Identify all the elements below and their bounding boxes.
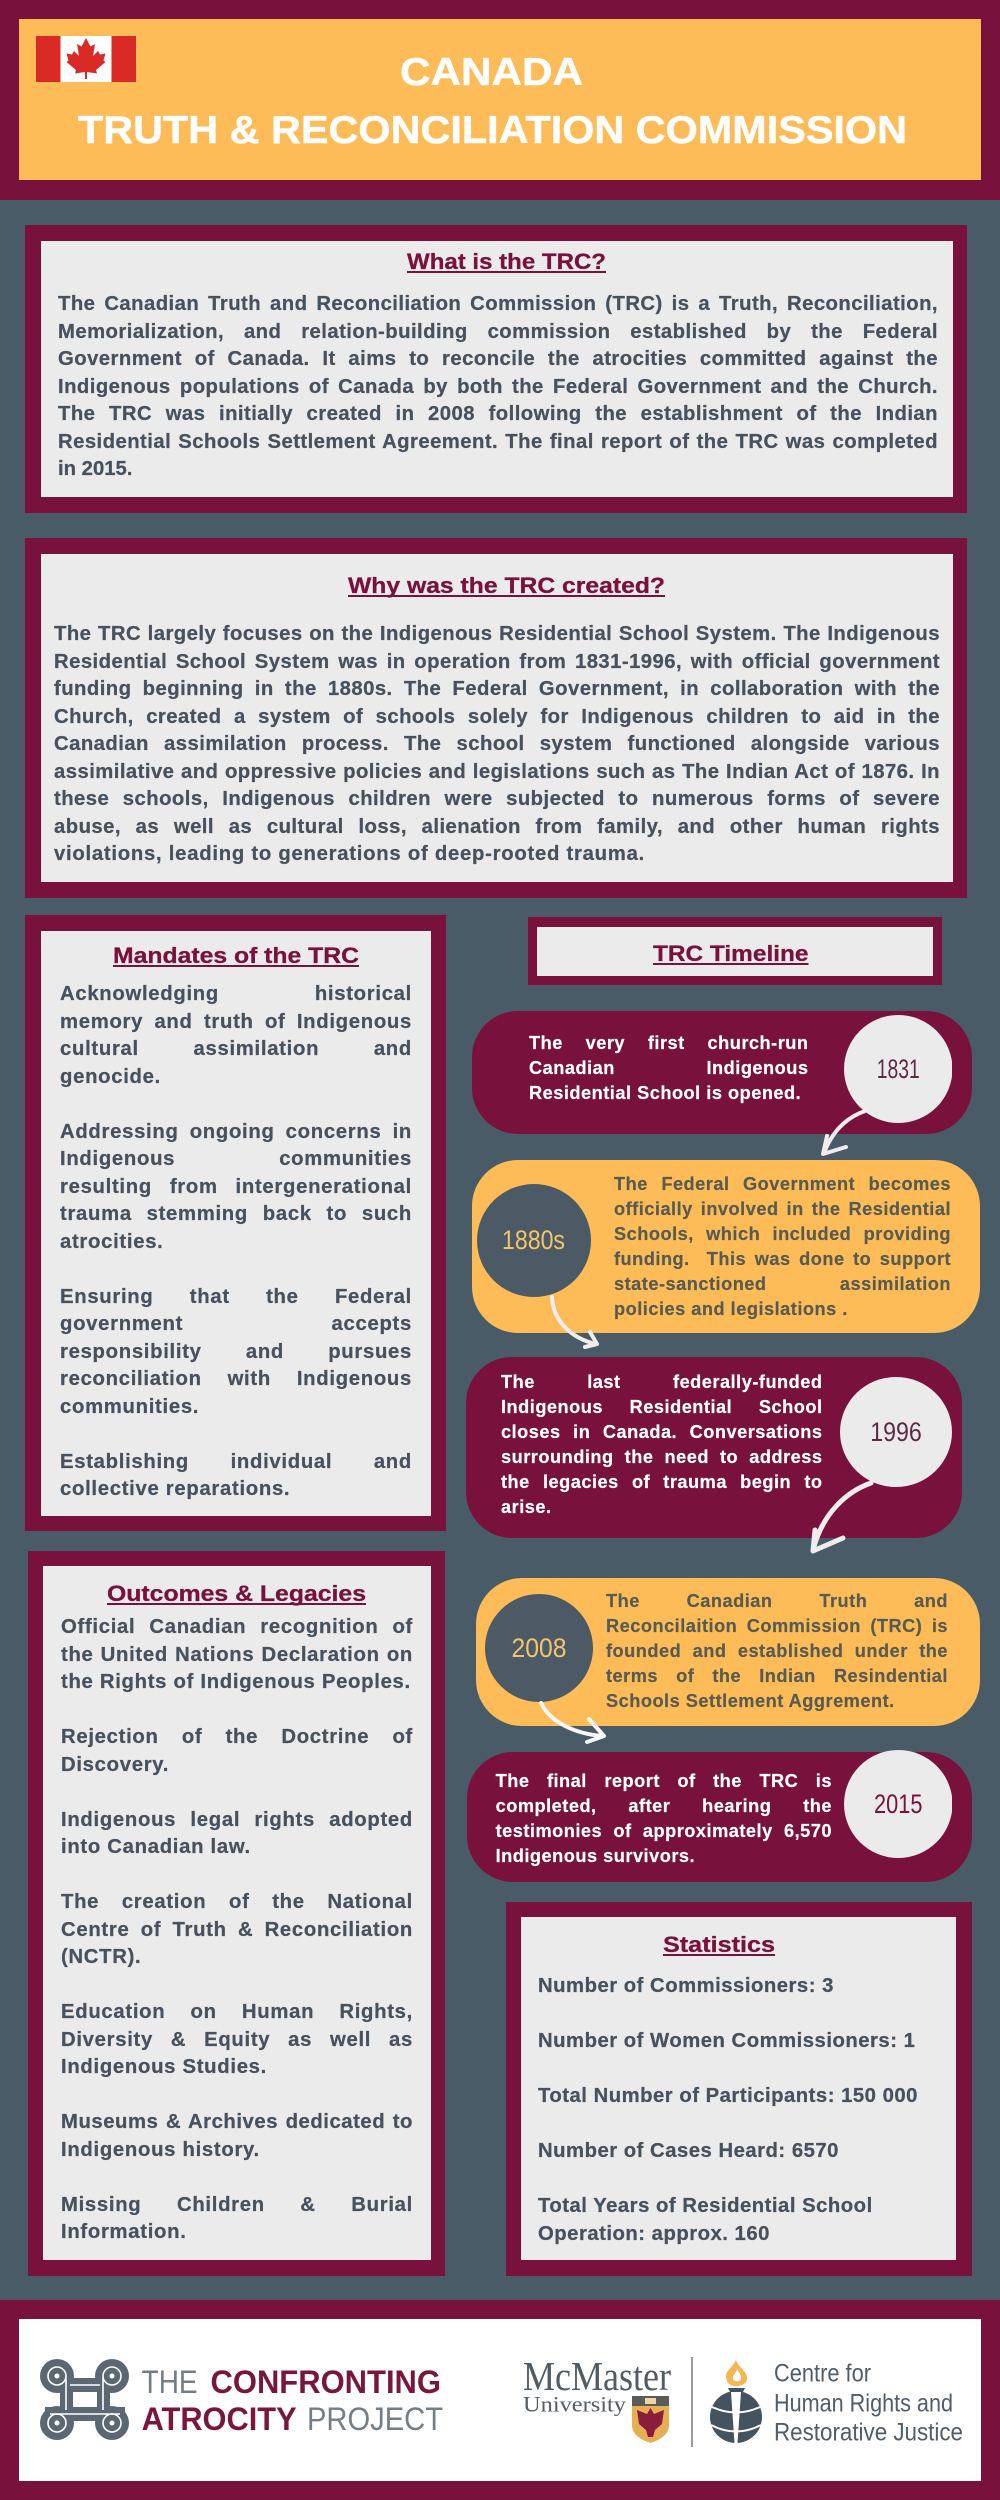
- text: outcomes list: Museums & Archives dedicated to: [61, 2111, 413, 2133]
- text: TRC description: in 2015.: [58, 458, 132, 480]
- footer logos: [19, 2319, 981, 2481]
- text: outcomes list: the Rights of Indigenous Peoples.: [61, 1671, 411, 1693]
- text: outcomes list: (NCTR).: [61, 1946, 141, 1968]
- text: why created: Canadian assimilation process. The school system functioned alongside various: [54, 733, 940, 755]
- text: 2015 event: [496, 1770, 832, 1866]
- title: CANADA: [400, 51, 583, 94]
- logo text: The Confronting Atrocity Project: [142, 2364, 443, 2437]
- year badge: 1996: 1996: [870, 1417, 922, 1447]
- heading: What is the TRC: What is the TRC?: [407, 249, 606, 274]
- text: 1880s event: The Federal Government becomes: [614, 1174, 951, 1194]
- text: 2008 event: The Canadian Truth and: [606, 1590, 948, 1610]
- heading: Mandates of the TRC: Mandates of the TRC: [113, 943, 359, 968]
- text: 1831 event: The very first church-run: [529, 1032, 808, 1052]
- title: [78, 51, 907, 150]
- text: mandates list: Ensuring that the Federal: [60, 1286, 412, 1308]
- heading: TRC Timeline: TRC Timeline: [653, 941, 808, 966]
- panel: Outcomes & Legacies: [28, 1551, 445, 2276]
- text: outcomes list: Indigenous Studies.: [61, 2056, 267, 2078]
- text: 1996 event: surrounding the need to address: [501, 1446, 822, 1466]
- text: outcomes list: into Canadian law.: [61, 1836, 251, 1858]
- text: statistics list: Total Number of Participants: 150 000: [538, 2085, 918, 2107]
- logo text: McMaster University: [523, 2353, 671, 2417]
- text: 1880s event: [614, 1174, 951, 1320]
- text: outcomes list: Indigenous history.: [61, 2138, 260, 2160]
- text: why created: The TRC largely focuses on the Indigenous Residential School System. The Indigenous: [54, 623, 940, 645]
- text: 1880s event: funding. This was done to support: [614, 1248, 951, 1268]
- text: 2008 event: [606, 1590, 948, 1712]
- text: mandates list: reconciliation with Indigenous: [60, 1368, 412, 1390]
- text: 2015 event: completed, after hearing the: [496, 1796, 832, 1816]
- text: 1996 event: the legacies of trauma begin to: [501, 1472, 822, 1492]
- year badge: 1880s: 1880s: [502, 1225, 565, 1255]
- logo text: McMaster University: University: [523, 2392, 626, 2417]
- logo text: Centre for Human Rights and Restorative Justice: Centre for: [774, 2360, 871, 2388]
- text: 2008 event: founded and established under the: [606, 1640, 948, 1660]
- arrow: 2008 to 2015: [538, 1700, 606, 1744]
- heading: Statistics: Statistics: [663, 1932, 775, 1957]
- text: 1831 event: [529, 1032, 808, 1104]
- text: TRC description: [58, 293, 938, 480]
- arrow: 1880s to 1996: [550, 1295, 600, 1349]
- text: 1880s event: state-sanctioned assimilation: [614, 1274, 951, 1294]
- text: why created: abuse, as well as cultural loss, alienation from family, and other human rights: [54, 816, 940, 838]
- text: outcomes list: Diversity & Equity as well as: [61, 2028, 413, 2050]
- text: TRC description: Residential Schools Settlement Agreement. The final report of the TRC was completed: [58, 430, 938, 452]
- text: mandates list: trauma stemming back to such: [60, 1203, 412, 1225]
- year badge: 1880s: [477, 1184, 591, 1297]
- logo text: The Confronting Atrocity Project: PROJECT: [307, 2401, 443, 2437]
- text: outcomes list: Missing Children & Burial: [61, 2194, 413, 2216]
- text: 1831 event: Residential School is opened.: [529, 1082, 801, 1102]
- text: 1880s event: officially involved in the Residential: [614, 1198, 951, 1218]
- text: mandates list: responsibility and pursues: [60, 1340, 412, 1362]
- text: 2015 event: Indigenous survivors.: [496, 1846, 695, 1866]
- heading: Why was the TRC created: Why was the TRC created?: [348, 573, 665, 598]
- text: outcomes list: Official Canadian recognition of: [61, 1616, 413, 1638]
- text: statistics list: Number of Women Commissioners: 1: [538, 2030, 915, 2052]
- text: 1996 event: Indigenous Residential School: [501, 1396, 822, 1416]
- text: outcomes list: Indigenous legal rights adopted: [61, 1808, 413, 1830]
- text: statistics list: Number of Commissioners: 3: [538, 1975, 834, 1997]
- text: 2015 event: The final report of the TRC is: [496, 1770, 832, 1790]
- text: outcomes list: the United Nations Declaration on: [61, 1644, 413, 1666]
- text: 2008 event: terms of the Indian Resindential: [606, 1666, 948, 1686]
- text: mandates list: genocide.: [60, 1066, 161, 1088]
- year badge: 1831: [844, 1015, 952, 1123]
- text: mandates list: resulting from intergenerational: [60, 1176, 412, 1198]
- text: statistics list: Total Years of Residential School: [538, 2195, 873, 2217]
- year badge: 1996: [840, 1377, 952, 1487]
- text: mandates list: [60, 983, 412, 1500]
- text: outcomes list: Rejection of the Doctrine of: [61, 1726, 413, 1748]
- header yellow panel: [19, 19, 981, 180]
- text: mandates list: atrocities.: [60, 1230, 164, 1252]
- timeline card: 2015: [467, 1752, 972, 1882]
- text: outcomes list: Discovery.: [61, 1754, 169, 1776]
- text: 2008 event: Schools Settlement Aggrement.: [606, 1690, 895, 1710]
- text: mandates list: Acknowledging historical: [60, 983, 412, 1005]
- text: TRC description: The TRC was initially created in 2008 following the establishment of the Indian: [58, 403, 938, 425]
- year badge: 2015: [844, 1750, 952, 1858]
- footer banner: [0, 2300, 1000, 2500]
- logo text: Centre for Human Rights and Restorative Justice: Human Rights and: [774, 2390, 953, 2418]
- text: 1996 event: [501, 1372, 822, 1516]
- logo text: McMaster University: McMaster: [523, 2353, 671, 2399]
- panel: Why was the TRC created: [25, 538, 967, 898]
- text: statistics list: Number of Cases Heard: 6570: [538, 2140, 839, 2162]
- text: outcomes list: [61, 1616, 413, 2243]
- text: outcomes list: Centre of Truth & Reconciliation: [61, 1918, 413, 1940]
- icon: Canadian flag: [36, 36, 136, 82]
- logo text: The Confronting Atrocity Project: ATROCITY: [142, 2401, 297, 2437]
- text: why created: Residential School System was in operation from 1831-1996, with official government: [54, 650, 940, 672]
- heading: Outcomes & Legacies: Outcomes & Legacies: [107, 1581, 366, 1606]
- text: outcomes list: Information.: [61, 2221, 187, 2243]
- year badge: 1831: 1831: [876, 1054, 919, 1084]
- text: why created: [54, 623, 940, 865]
- text: why created: these schools, Indigenous children were subjected to numerous forms of severe: [54, 788, 940, 810]
- text: why created: Church, created a system of schools solely for Indigenous children to aid in the: [54, 706, 940, 728]
- text: mandates list: Indigenous communities: [60, 1148, 412, 1170]
- icon: McMaster shield: [632, 2396, 669, 2443]
- text: TRC description: Indigenous populations of Canada by both the Federal Government and the Church.: [58, 376, 938, 398]
- year badge: 2008: [485, 1594, 593, 1702]
- text: 1880s event: Schools, which included providing: [614, 1224, 951, 1244]
- panel: TRC Timeline heading: [528, 917, 942, 985]
- arrow: 1831 to 1880s: [821, 1110, 866, 1156]
- logo text: The Confronting Atrocity Project: THE: [142, 2364, 198, 2400]
- text: 1996 event: The last federally-funded: [501, 1372, 822, 1392]
- year badge: 2008: 2008: [511, 1633, 566, 1663]
- text: TRC description: The Canadian Truth and Reconciliation Commission (TRC) is a Truth, Reconciliation,: [58, 293, 938, 315]
- text: why created: funding beginning in the 1880s. The Federal Government, in collaboration with the: [54, 678, 940, 700]
- arrow: 1996 to 2008: [810, 1480, 874, 1554]
- text: TRC description: Government of Canada. It aims to reconcile the atrocities committed against the: [58, 348, 938, 370]
- logo text: The Confronting Atrocity Project: CONFRONTING: [210, 2364, 441, 2400]
- year badge: 2015: 2015: [874, 1789, 922, 1819]
- text: 1996 event: arise.: [501, 1496, 552, 1516]
- icon: Confronting Atrocity knot: [40, 2359, 129, 2440]
- text: mandates list: memory and truth of Indigenous: [60, 1010, 412, 1032]
- text: mandates list: government accepts: [60, 1313, 412, 1335]
- text: mandates list: Addressing ongoing concerns in: [60, 1120, 412, 1142]
- text: 2008 event: Reconcilaition Commission (TRC) is: [606, 1616, 948, 1636]
- text: mandates list: collective reparations.: [60, 1478, 290, 1500]
- panel: Mandates of the TRC: [25, 915, 446, 1531]
- logo text: Centre for Human Rights and Restorative Justice: Restorative Justice: [774, 2419, 963, 2447]
- text: TRC description: Memorialization, and relation-building commission established by the Federal: [58, 320, 938, 342]
- timeline card: 1880s: [472, 1160, 980, 1333]
- logo text: Centre for Human Rights and Restorative Justice: [774, 2360, 963, 2447]
- text: mandates list: cultural assimilation and: [60, 1038, 412, 1060]
- timeline card: 1831: [472, 1011, 972, 1134]
- timeline card: 1996: [466, 1357, 962, 1538]
- text: 1831 event: Canadian Indigenous: [529, 1058, 808, 1078]
- text: statistics list: [538, 1975, 918, 2245]
- header banner: [0, 0, 1000, 200]
- text: outcomes list: The creation of the National: [61, 1891, 413, 1913]
- text: 2015 event: testimonies of approximately 6,570: [496, 1820, 832, 1840]
- text: why created: assimilative and oppressive policies and legislations such as The Indian Act of 1876. In: [54, 760, 940, 782]
- text: why created: violations, leading to generations of deep-rooted trauma.: [54, 843, 645, 865]
- text: statistics list: Operation: approx. 160: [538, 2223, 770, 2245]
- panel: What is the TRC: [25, 225, 967, 513]
- text: 1880s event: policies and legislations .: [614, 1298, 848, 1318]
- text: mandates list: Establishing individual and: [60, 1450, 412, 1472]
- text: outcomes list: Education on Human Rights,: [61, 2001, 413, 2023]
- icon: torch and globe: [710, 2360, 762, 2443]
- panel: Statistics: [506, 1902, 972, 2276]
- text: 1996 event: closes in Canada. Conversations: [501, 1422, 822, 1442]
- timeline card: 2008: [476, 1578, 980, 1726]
- text: mandates list: communities.: [60, 1396, 199, 1418]
